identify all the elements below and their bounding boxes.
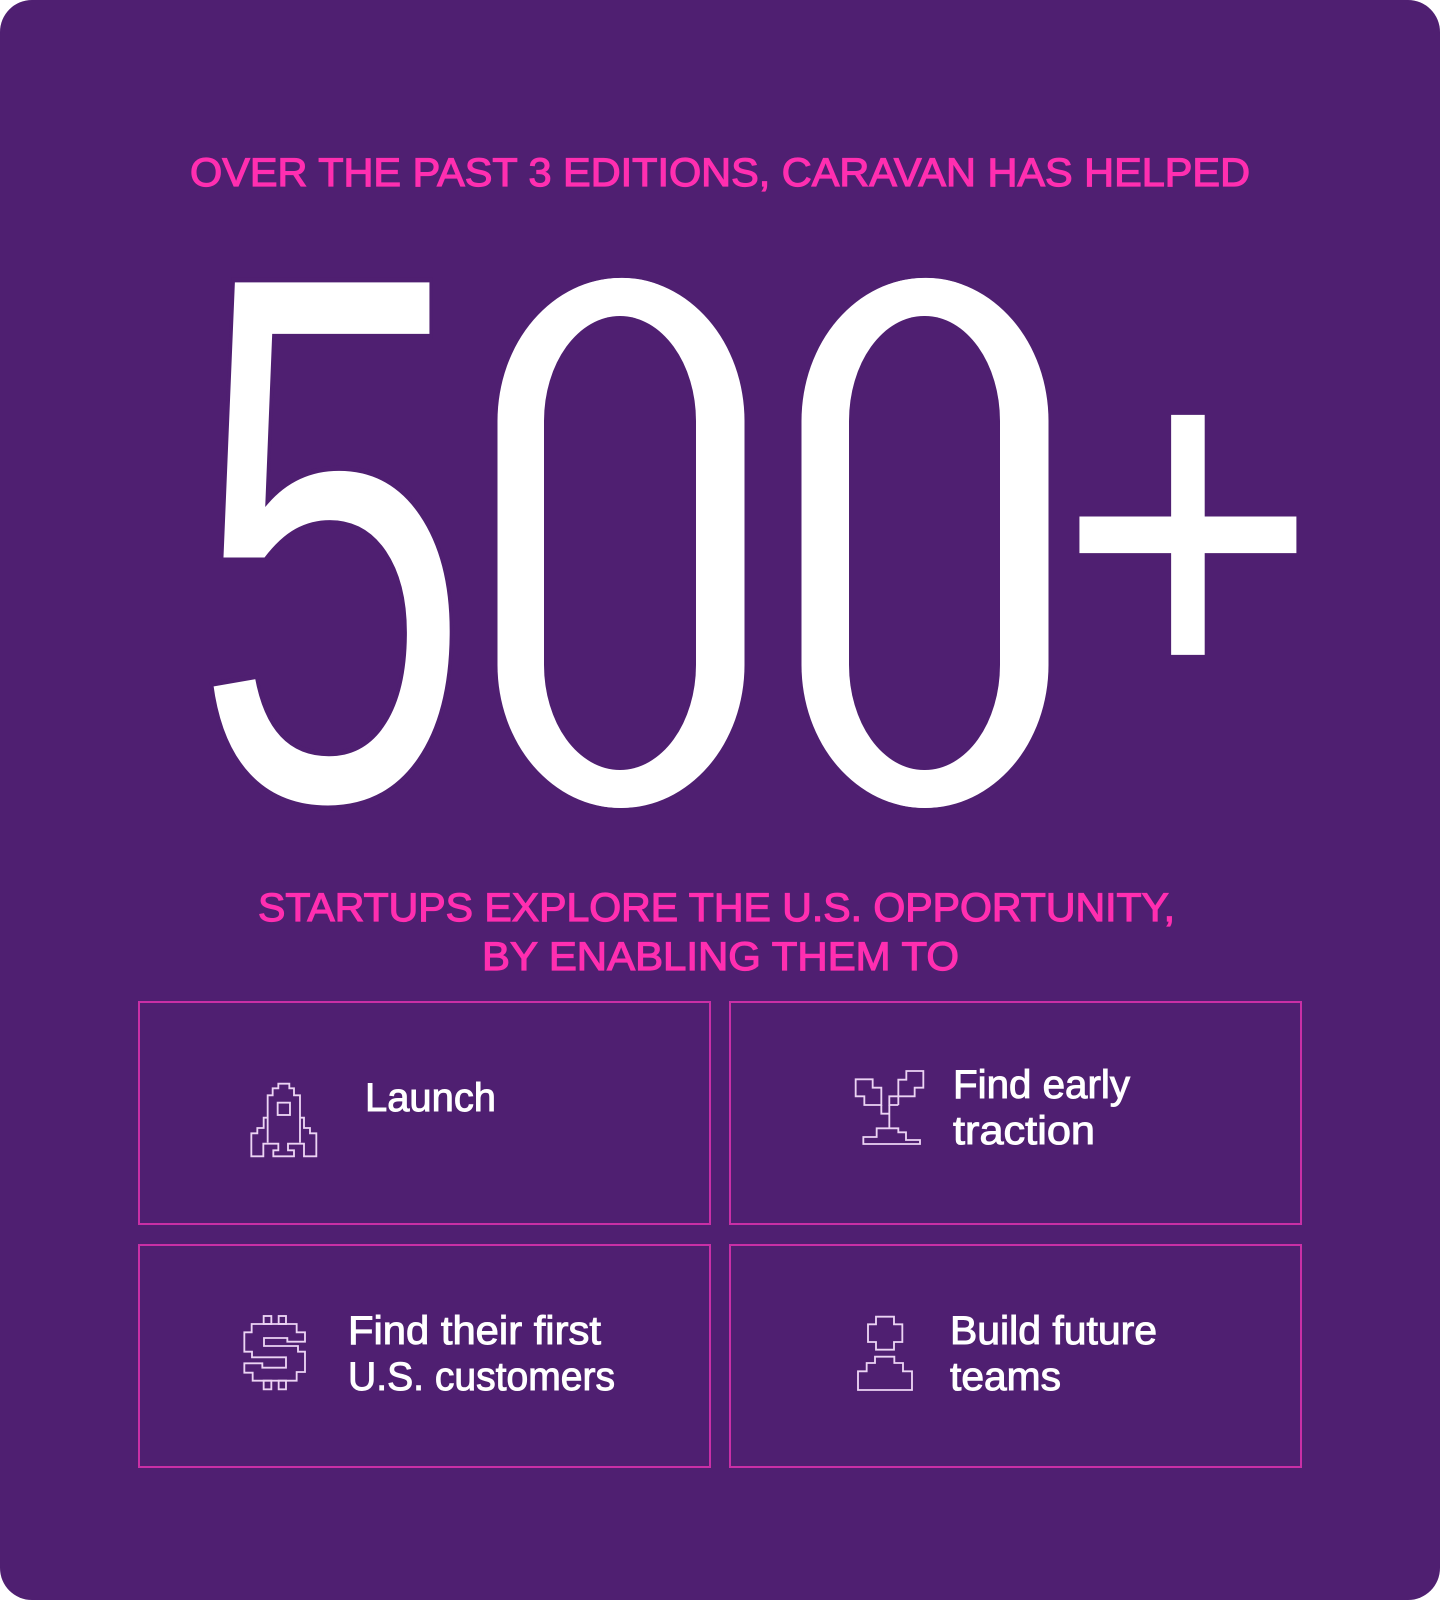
big number 500+: 0 bbox=[478, 124, 764, 960]
label: build future teams: Build future bbox=[950, 1309, 1157, 1353]
panel: launch bbox=[139, 1002, 710, 1224]
label: find early traction bbox=[953, 1063, 1130, 1153]
big number 500+: 5 bbox=[191, 116, 473, 962]
panel: find early traction bbox=[730, 1002, 1301, 1224]
icon: plant bbox=[856, 1071, 923, 1144]
follow-up heading: STARTUPS EXPLORE THE U.S. OPPORTUNITY, bbox=[258, 886, 1175, 930]
icon: rocket bbox=[251, 1084, 316, 1156]
big number 500+: 0 bbox=[782, 124, 1068, 960]
label: find early traction: Find early bbox=[953, 1063, 1130, 1107]
label: build future teams: teams bbox=[950, 1355, 1061, 1399]
label: find their first customers bbox=[348, 1309, 615, 1399]
label: find early traction: traction bbox=[953, 1109, 1095, 1153]
label: build future teams bbox=[950, 1309, 1157, 1399]
big number 500+ bbox=[191, 116, 1317, 962]
icon: person bbox=[858, 1317, 912, 1390]
icon: dollar bbox=[244, 1316, 305, 1389]
label: launch: Launch bbox=[365, 1076, 496, 1120]
panel: build future teams bbox=[730, 1245, 1301, 1467]
panel: find first customers bbox=[139, 1245, 710, 1467]
big number 500+: + bbox=[1059, 256, 1317, 800]
label: find their first customers: U.S. customers bbox=[348, 1355, 615, 1399]
intro heading: OVER THE PAST 3 EDITIONS, CARAVAN HAS HELPED bbox=[190, 151, 1250, 195]
follow-up heading bbox=[258, 886, 1175, 979]
follow-up heading: BY ENABLING THEM TO bbox=[482, 935, 959, 979]
label: find their first customers: Find their first bbox=[348, 1309, 601, 1353]
